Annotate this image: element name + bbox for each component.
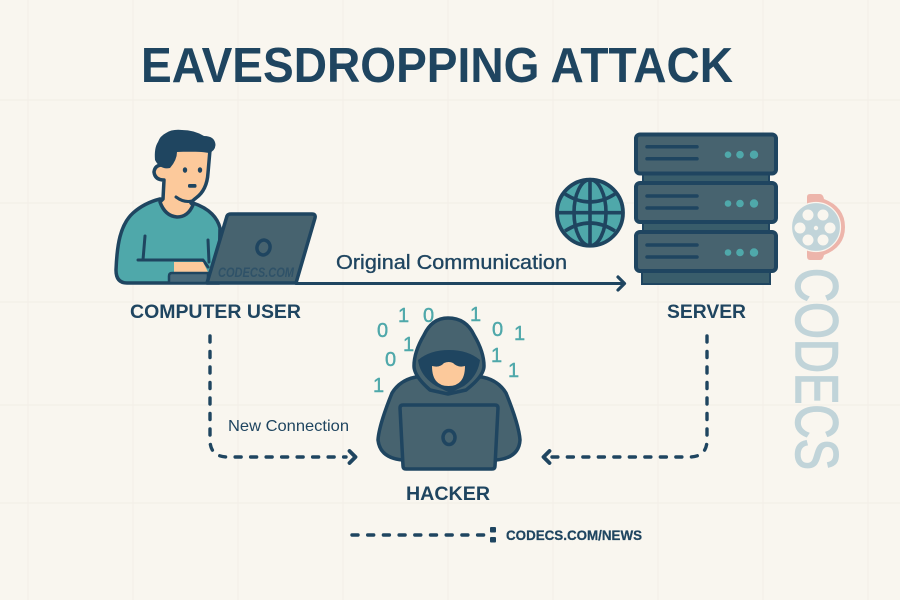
laptop	[207, 214, 315, 283]
binary digits: 0	[385, 349, 396, 371]
hacker laptop logo	[443, 430, 455, 444]
hacker body	[378, 377, 520, 460]
label: original communication: Original Communication	[336, 252, 567, 274]
user face	[183, 167, 202, 188]
binary digits: 0	[492, 319, 503, 341]
user arms	[138, 236, 209, 267]
server unit 1	[636, 134, 776, 174]
arrow: user to hacker	[210, 336, 356, 463]
server base	[642, 270, 770, 284]
footer url: CODECS.COM/NEWS	[506, 527, 642, 543]
keyboard	[169, 273, 208, 283]
arrow: original communication	[296, 277, 624, 290]
icon: globe	[557, 179, 623, 246]
binary digits: 1	[514, 323, 525, 345]
user neck and head	[154, 150, 210, 217]
hacker face	[432, 362, 465, 386]
laptop watermark: CODECS.COM	[218, 264, 294, 280]
watermark: codecs logo	[783, 194, 850, 470]
logo reel	[792, 202, 840, 252]
binary digits: 1	[470, 304, 481, 326]
label: server: SERVER	[667, 302, 746, 323]
laptop logo	[255, 239, 272, 256]
legend: dashed line	[352, 527, 496, 542]
server unit 3	[636, 232, 776, 271]
icon: server rack	[636, 134, 776, 284]
logo wordmark: CODECS	[783, 268, 850, 470]
icon: hacker	[378, 318, 520, 469]
label: hacker: HACKER	[406, 484, 490, 505]
server connectors	[643, 172, 769, 184]
user torso	[116, 199, 220, 283]
hacker hood opening	[418, 350, 480, 393]
label: computer user: COMPUTER USER	[130, 302, 301, 323]
label: new connection: New Connection	[228, 418, 349, 435]
logo ring	[807, 194, 845, 260]
hacker hood	[414, 318, 484, 394]
binary digits	[373, 304, 525, 397]
user hair	[155, 130, 216, 168]
binary digits: 0	[377, 320, 388, 342]
icon: computer user	[116, 130, 315, 283]
title: EAVESDROPPING ATTACK	[141, 39, 733, 93]
binary digits: 1	[373, 375, 384, 397]
binary digits: 1	[491, 345, 502, 367]
arrow: server to hacker	[544, 336, 707, 463]
binary digits: 1	[398, 305, 409, 327]
binary digits: 1	[508, 360, 519, 382]
server unit 2	[636, 183, 776, 222]
hacker laptop	[400, 405, 498, 469]
binary digits: 1	[403, 334, 414, 356]
binary digits: 0	[423, 305, 434, 327]
